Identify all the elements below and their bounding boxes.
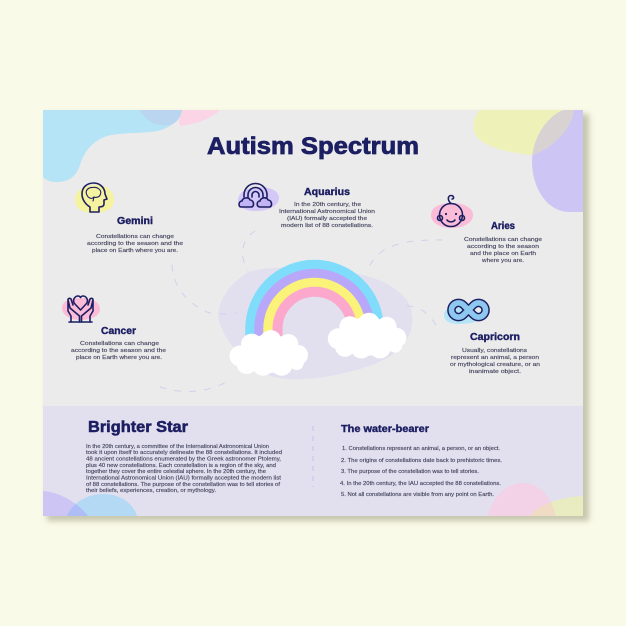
heading: Capricorn <box>470 332 520 343</box>
heading: Aquarius <box>304 187 350 198</box>
icon: rainbow with clouds <box>238 184 279 211</box>
body text: according to the season <box>467 244 539 250</box>
icon: head with brain <box>75 183 114 213</box>
body text: and the place on Earth <box>470 251 536 257</box>
body text: plus 40 new constellations. Each constellation is a region of the sky, and <box>86 463 276 469</box>
decorative corner blobs <box>43 110 583 212</box>
dashed connector: aquarius <box>243 231 255 271</box>
dashed connector: aries <box>370 240 442 265</box>
panel: brighter star <box>86 419 282 494</box>
body text: In the 20th century, a committee of the International Astronomical Union <box>86 444 269 450</box>
body text: Constellations can change <box>464 237 542 243</box>
body text <box>86 444 282 494</box>
body text: or mythological creature, or an <box>450 362 540 368</box>
dashed connector: gemini <box>172 265 236 314</box>
section: aries <box>431 196 542 264</box>
numbered list: 3. The purpose of the constellation was to tell stories. <box>341 469 479 475</box>
section: capricorn <box>444 303 540 375</box>
panel: the water-bearer <box>340 423 502 498</box>
body text <box>87 234 183 254</box>
numbered list <box>340 446 502 498</box>
icon: baby face <box>431 196 473 228</box>
left cloud <box>230 330 308 376</box>
body text: (IAU) formally accepted the <box>287 216 367 222</box>
right cloud <box>328 313 406 358</box>
heading: Aries <box>491 221 515 232</box>
body text: International Astronomical Union <box>279 209 375 215</box>
card shadow <box>47 114 589 521</box>
numbered list: 1. Constellations represent an animal, a person, or an object. <box>342 446 500 452</box>
divider <box>312 426 314 487</box>
body text <box>71 341 166 361</box>
body text: represent an animal, a person <box>451 355 539 361</box>
panel: bottom band <box>43 406 583 516</box>
body text <box>450 348 540 375</box>
decorative bottom blobs <box>43 483 583 516</box>
heading: Gemini <box>117 216 153 227</box>
body text: inanimate object. <box>469 369 521 375</box>
body text: according to the season and the <box>71 348 166 354</box>
heading: Cancer <box>101 326 136 337</box>
dashed connector: cancer <box>160 380 230 391</box>
icon: infinity <box>444 303 486 324</box>
body text: In the 20th century, the <box>294 202 361 208</box>
section: cancer <box>62 296 166 361</box>
heading: Brighter Star <box>88 419 188 436</box>
numbered list: 4. In the 20th century, the IAU accepted the 88 constellations. <box>340 481 501 487</box>
body text: Usually, constellations <box>462 348 527 354</box>
section: gemini <box>75 183 183 254</box>
body text: took it upon itself to accurately delineate the 88 constellations. It included <box>86 450 282 456</box>
body text: their beliefs, experiences, creation, or mythology. <box>86 488 216 494</box>
icon: hands holding heart <box>62 296 100 322</box>
body text: Constellations can change <box>96 234 174 240</box>
body text: where you are. <box>481 258 524 264</box>
title: Autism Spectrum <box>207 133 419 160</box>
body text: International Astronomical Union (IAU) formally accepted the modern list <box>86 476 281 482</box>
body text: Constellations can change <box>80 341 159 347</box>
card background <box>43 110 583 406</box>
body text: place on Earth where you are. <box>76 355 162 361</box>
body text: 48 ancient constellations enumerated by the Greek astronomer Ptolemy, <box>86 456 281 462</box>
heading: The water-bearer <box>341 423 429 435</box>
numbered list: 2. The origins of constellations date back to prehistoric times. <box>341 458 502 464</box>
body text: according to the season and the <box>87 241 183 247</box>
numbered list: 5. Not all constellations are visible from any point on Earth. <box>341 492 494 498</box>
dashed connector: capricorn <box>407 306 437 327</box>
body text: of 88 constellations. The purpose of the constellation was to tell stories of <box>86 482 280 488</box>
section: aquarius <box>238 184 375 229</box>
body text: modern list of 88 constellations. <box>281 223 373 229</box>
body text <box>464 237 542 264</box>
rainbow illustration <box>218 264 412 379</box>
body text: together they cover the entire celestial sphere. In the 20th century, the <box>86 469 266 475</box>
body text: place on Earth where you are. <box>92 248 178 254</box>
body text <box>279 202 375 229</box>
